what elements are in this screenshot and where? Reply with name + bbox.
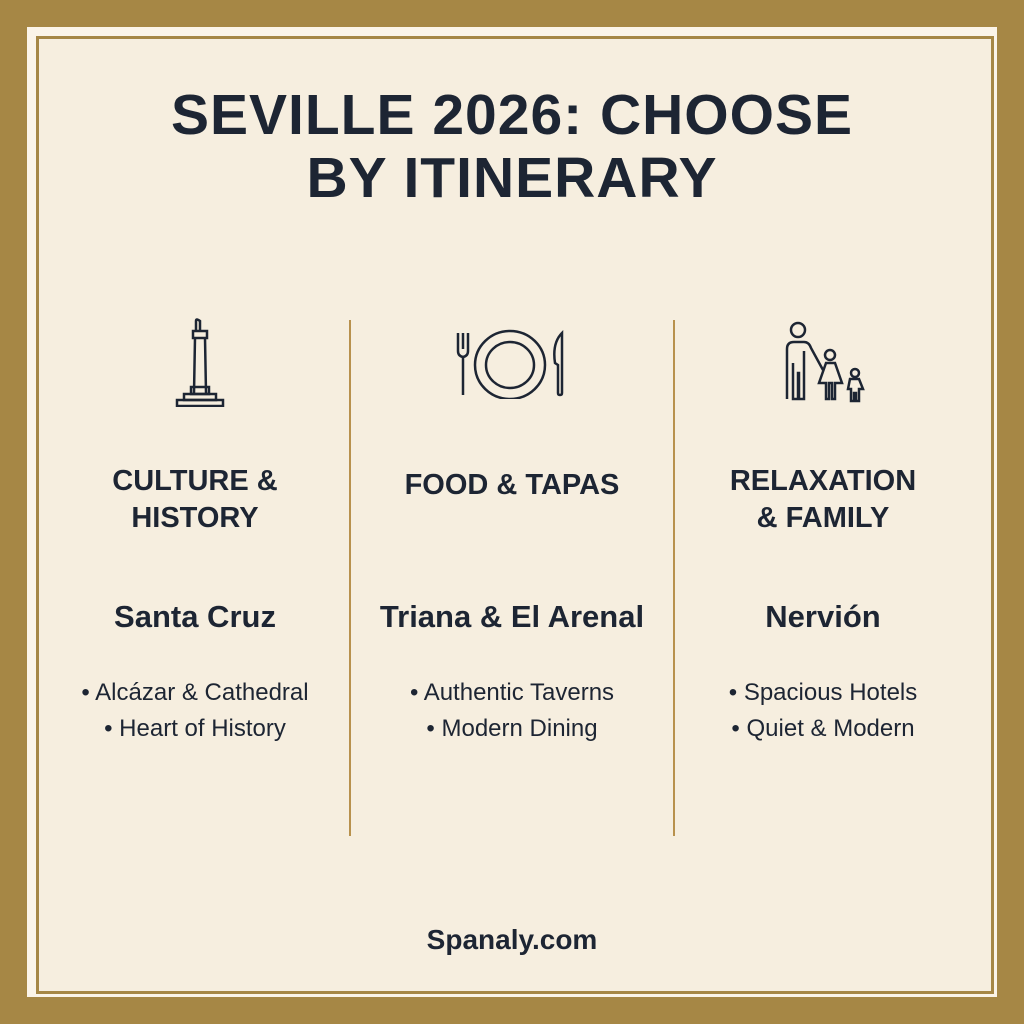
bullets [410,679,614,742]
icon: plate and cutlery [456,330,564,399]
bullets: • Modern Dining [426,715,598,742]
district: Santa Cruz [114,599,276,634]
bullets: • Quiet & Modern [731,715,915,742]
bullets: • Authentic Taverns [410,679,614,706]
heading: RELAXATION [730,465,916,497]
divider [673,320,675,836]
district: Nervión [765,599,881,634]
bullets: • Heart of History [104,715,286,742]
bullets: • Alcázar & Cathedral [81,679,309,706]
heading: & FAMILY [757,502,889,534]
heading: CULTURE & [112,465,278,497]
bullets [81,679,309,742]
icon: monument [176,318,224,407]
panel: relaxation [729,322,917,742]
heading: HISTORY [131,502,259,534]
title: SEVILLE 2026: CHOOSE [171,83,853,147]
heading [730,465,916,534]
heading: FOOD & TAPAS [405,469,619,501]
district: Triana & El Arenal [380,599,644,634]
title: BY ITINERARY [306,146,718,210]
title [171,83,853,210]
bullets [729,679,917,742]
bullets: • Spacious Hotels [729,679,917,706]
panel: food [380,330,644,742]
heading [112,465,278,534]
icon: family [786,322,865,402]
panel: culture [81,318,309,742]
divider [349,320,351,836]
footer: Spanaly.com [427,924,597,955]
